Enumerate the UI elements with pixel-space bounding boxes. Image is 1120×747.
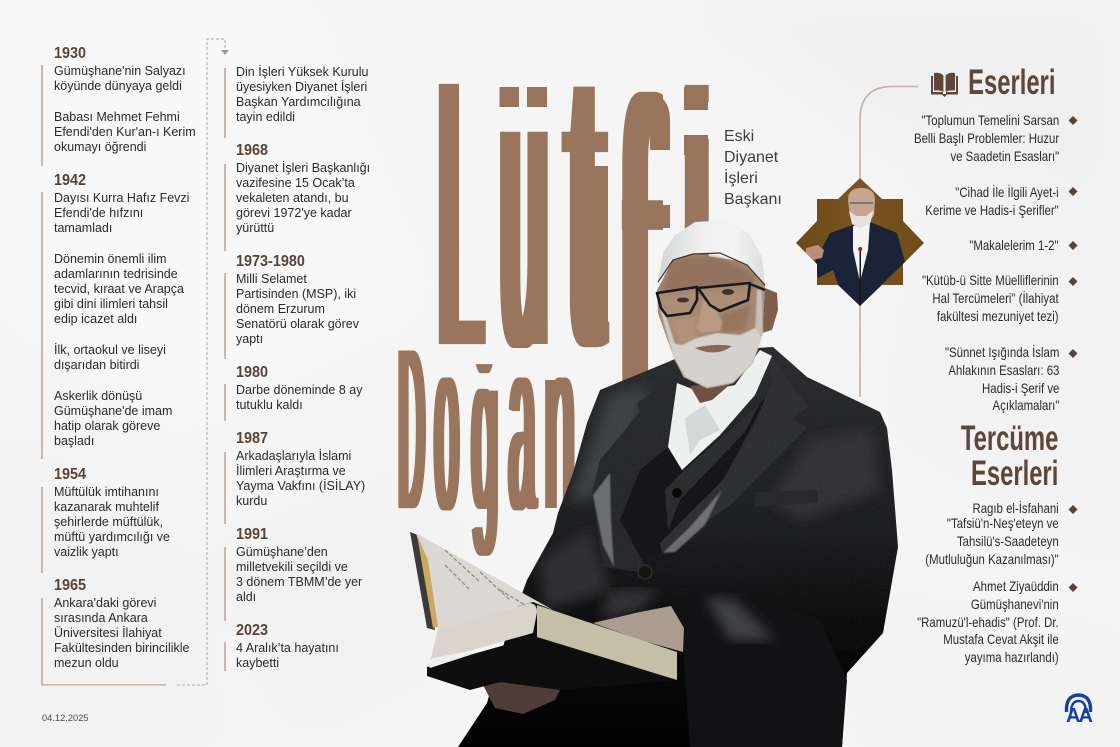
- head: [657, 220, 778, 388]
- beard: [670, 328, 762, 388]
- entry 2023: [236, 622, 339, 670]
- entry 1942: Dayısı Kurra Hafız Fevzi: [54, 191, 189, 205]
- shirt: [668, 350, 772, 470]
- entry 1942: tecvid, kıraat ve Arapça: [54, 282, 184, 296]
- entry continued: üyesiyken Diyanet İşleri: [236, 80, 367, 94]
- entry 1954: şehirlerde müftülük,: [54, 515, 163, 529]
- entry 1942: Gümüşhane'de imam: [54, 404, 172, 418]
- entry 1930: köyünde dünyaya geldi: [54, 79, 182, 93]
- subtitle: İşleri: [724, 170, 758, 186]
- jacket: [458, 347, 898, 747]
- big title: Doğan: ğ: [472, 303, 498, 561]
- jacket button: [638, 565, 652, 579]
- entry 1987: 1987: [236, 430, 268, 447]
- entry 1980: 1980: [236, 364, 268, 381]
- subtitle: Başkanı: [724, 190, 782, 208]
- work 5: "Sünnet Işığında İslam: [945, 344, 1059, 360]
- entry 1968: görevi 1972'ye kadar: [236, 206, 352, 220]
- entry 1968: [236, 142, 370, 235]
- translation 1: "Tafsiü'n-Neş'eteyn ve: [947, 515, 1059, 531]
- entry 1987: Arkadaşlarıyla İslami: [236, 449, 351, 463]
- entry 1973-1980: Milli Selamet: [236, 272, 307, 286]
- entry 1965: Üniversitesi İlahiyat: [54, 626, 162, 640]
- translation 2: Ahmet Ziyaüddin: [973, 578, 1059, 594]
- heading: Eserleri with book icon: [931, 63, 1055, 102]
- entry 2023: 2023: [236, 622, 268, 639]
- list: works: [914, 112, 1059, 413]
- entry 1965: Ankara'daki görevi: [54, 596, 156, 610]
- heading: Tercüme Eserleri: Eserleri: [971, 454, 1058, 493]
- entry 1973-1980: [236, 253, 359, 346]
- big title: Lütfi: i: [683, 34, 711, 343]
- work 5: Hadis-i Şerif ve: [982, 380, 1059, 396]
- cap: [658, 220, 765, 285]
- hand on book: [593, 606, 684, 652]
- entry 1980: tutuklu kaldı: [236, 398, 303, 412]
- entry 2023: kaybetti: [236, 656, 279, 670]
- entry 1942: İlk, ortaokul ve liseyi: [54, 343, 166, 357]
- work 2: [926, 184, 1059, 218]
- subtitle: [724, 128, 782, 208]
- big title: Doğan: n: [545, 285, 574, 565]
- heading text: Eserleri: [968, 63, 1055, 102]
- translation 1: Tahsilü's-Saadeteyn: [957, 533, 1059, 549]
- portrait photo illustration: [410, 221, 898, 747]
- face: [657, 254, 765, 388]
- sleeve: [673, 592, 847, 747]
- translation 1: (Mutluluğun Kazanılması)": [926, 551, 1059, 567]
- entry 1930: 1930: [54, 45, 86, 62]
- entry 1973-1980: dönem Erzurum: [236, 302, 325, 316]
- work 4: "Kütüb-ü Sitte Müelliflerinin: [922, 272, 1059, 288]
- work 4: fakültesi mezuniyet tezi): [937, 308, 1059, 324]
- entry 1987: İlimleri Araştırma ve: [236, 464, 346, 478]
- mouth: [695, 345, 732, 353]
- entry 1987: kurdu: [236, 494, 267, 508]
- big title: Lütfi: L: [439, 0, 482, 433]
- entry continued: Din İşleri Yüksek Kurulu: [236, 64, 368, 78]
- title detail: letter refinements: [500, 86, 708, 322]
- entry 2023: 4 Aralık’ta hayatını: [236, 641, 339, 655]
- entry 1930: okumayı öğrendi: [54, 140, 146, 154]
- entry continued: [236, 64, 368, 124]
- lower hand: [482, 680, 565, 714]
- entry 1980: [236, 364, 362, 412]
- entry 1942: tamamladı: [54, 221, 112, 235]
- jacket soft highlights: [570, 385, 650, 500]
- entry 1968: vekaleten atandı, bu: [236, 191, 349, 205]
- icon: open book: [931, 72, 958, 97]
- entry 1965: 1965: [54, 577, 86, 594]
- work 5: Açıklamaları": [992, 397, 1059, 413]
- vest: [620, 397, 767, 562]
- glasses: [657, 283, 750, 316]
- translation 1: Ragıb el-İsfahani: [973, 500, 1059, 516]
- entry 1965: [54, 577, 189, 670]
- entry 1973-1980: yaptı: [236, 332, 263, 346]
- entry 1930: Babası Mehmet Fehmi: [54, 110, 180, 124]
- entry 1987: Yayma Vakfını (İSİLAY): [236, 479, 365, 493]
- entry 1942: [54, 172, 189, 448]
- heading: Tercüme Eserleri: Tercüme: [961, 419, 1058, 458]
- small star portrait photo: [796, 178, 924, 306]
- ear: [762, 288, 778, 333]
- timeline column 1: [54, 45, 196, 670]
- entry 1942: Askerlik dönüşü: [54, 389, 142, 403]
- entry continued: Başkan Yardımcılığına: [236, 94, 361, 108]
- entry 1973-1980: Partisinden (MSP), iki: [236, 287, 356, 301]
- book: [410, 532, 678, 690]
- AA logo: [1064, 693, 1092, 725]
- work 1: [914, 112, 1059, 164]
- heading: Tercüme Eserleri: [961, 419, 1058, 493]
- entry 1968: yürüttü: [236, 221, 274, 235]
- entry 1991: 1991: [236, 526, 268, 543]
- entry 1942: Dönemin önemli ilim: [54, 252, 167, 266]
- entry 1954: Müftülük imtihanını: [54, 485, 159, 499]
- list: translated works: [917, 500, 1059, 665]
- translation 2: Mustafa Cevat Akşit ile: [944, 631, 1059, 647]
- big title: Doğan: a: [509, 285, 535, 565]
- entry 1954: 1954: [54, 466, 86, 483]
- entry 1968: 1968: [236, 142, 268, 159]
- right lapel: [660, 397, 806, 553]
- entry 1930: Gümüşhane'nin Salyazı: [54, 64, 186, 78]
- entry 1954: müftü yardımcılığı ve: [54, 530, 170, 544]
- entry 1930: Efendi'den Kur'an-ı Kerim: [54, 125, 196, 139]
- subtitle: Diyanet: [724, 148, 778, 166]
- big title: Lütfi: [438, 84, 709, 381]
- entry 1973-1980: Senatörü olarak görev: [236, 317, 359, 331]
- entry 1942: adamlarının tedrisinde: [54, 267, 178, 281]
- entry 1954: vaizlik yaptı: [54, 545, 119, 559]
- entry 1954: [54, 466, 170, 559]
- work 5: Ahlakının Esasları: 63: [948, 362, 1059, 378]
- entry 1965: Fakültesinden birincilikle: [54, 641, 189, 655]
- big title: Doğan: D: [399, 299, 424, 562]
- subtitle: Eski: [724, 128, 754, 144]
- translation 1: [926, 500, 1059, 567]
- entry 1980: Darbe döneminde 8 ay: [236, 383, 362, 397]
- big title: Lütfi: f: [616, 0, 656, 614]
- entry 1942: gibi dini ilimleri tahsil: [54, 297, 168, 311]
- entry continued: tayin edildi: [236, 110, 295, 124]
- work 2: Kerime ve Hadis-i Şerifler": [926, 202, 1059, 218]
- translation 2: Gümüşhanevi'nin: [971, 596, 1059, 612]
- left lapel: [592, 396, 649, 572]
- work 1: "Toplumun Temelini Sarsan: [921, 112, 1059, 128]
- entry 1930: [54, 45, 196, 154]
- date: 04.12.2025: [42, 713, 89, 723]
- pocket: [755, 490, 818, 507]
- work 4: [922, 272, 1059, 324]
- translation 2: yayıma hazırlandı): [965, 649, 1059, 665]
- work 3: "Makalelerim 1-2": [970, 237, 1059, 253]
- entry 1942: edip icazet aldı: [54, 312, 137, 326]
- work 2: "Cihad İle İlgili Ayet-i: [956, 184, 1059, 200]
- work 5: [945, 344, 1059, 413]
- entry 1991: milletvekili seçildi ve: [236, 560, 348, 574]
- entry 1968: vazifesine 15 Ocak’ta: [236, 176, 355, 190]
- entry 1965: mezun oldu: [54, 656, 119, 670]
- big title: Doğan: o: [435, 285, 458, 565]
- bullet diamonds: [1068, 116, 1078, 592]
- work 1: Belli Başlı Problemler: Huzur: [914, 130, 1059, 146]
- entry 1991: 3 dönem TBMM’de yer: [236, 575, 362, 589]
- work 4: Hal Tercümeleri" (İlahiyat: [933, 290, 1059, 306]
- entry 1942: hatip olarak göreve: [54, 419, 160, 433]
- translation 2: "Ramuzü'l-ehadis" (Prof. Dr.: [917, 614, 1059, 630]
- entry 1965: sırasında Ankara: [54, 611, 148, 625]
- entry 1991: aldı: [236, 590, 256, 604]
- entry 1942: Efendi'de hıfzını: [54, 206, 143, 220]
- entry 1987: [236, 430, 365, 508]
- entry 1991: [236, 526, 362, 604]
- entry 1991: Gümüşhane’den: [236, 545, 328, 559]
- work 1: ve Saadetin Esasları": [950, 148, 1059, 164]
- entry 1942: başladı: [54, 434, 94, 448]
- translation 2: [917, 578, 1059, 665]
- entry 1942: dışarıdan bitirdi: [54, 358, 139, 372]
- entry 1968: Diyanet İşleri Başkanlığı: [236, 161, 370, 175]
- timeline column 2: [236, 64, 370, 670]
- entry 1942: 1942: [54, 172, 86, 189]
- entry 1973-1980: 1973-1980: [236, 253, 305, 270]
- big title: Doğan: [398, 350, 575, 556]
- entry 1954: kazanarak muhtelif: [54, 500, 159, 514]
